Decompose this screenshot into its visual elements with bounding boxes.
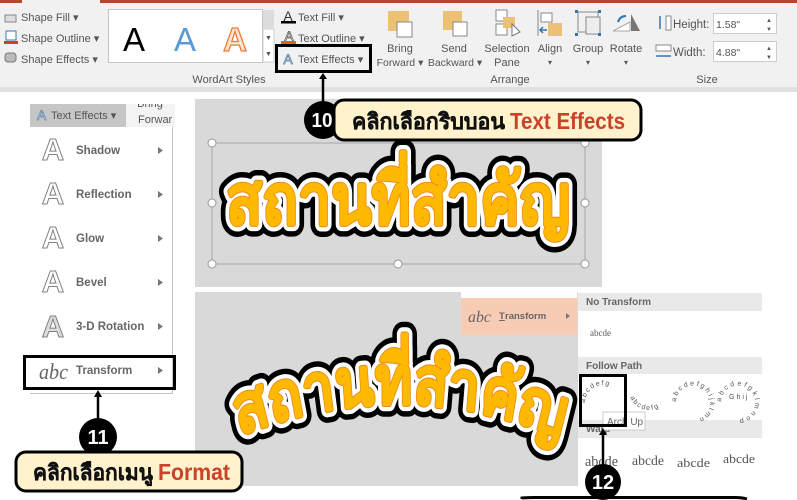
menu item: bevel: A: [42, 264, 64, 299]
size controls: ▼: [766, 27, 772, 33]
WordArt styles gallery: A: [123, 21, 145, 58]
arrange buttons: Pane: [494, 57, 520, 69]
menu item: 3-D rotation: A: [42, 309, 64, 344]
WordArt: arch up: สถานที่สำคัญ: [224, 322, 578, 461]
menu item: transform: abc: [39, 359, 68, 384]
menu item: reflection: A: [42, 176, 64, 211]
WordArt styles gallery: [108, 10, 274, 62]
menu item: 3-D rotation: [42, 309, 163, 344]
menu item: shadow: Shadow: [76, 145, 120, 157]
arrange buttons: Send: [441, 43, 467, 55]
size controls: 4.88": [716, 47, 740, 59]
tooltip: arch up: Arch Up: [607, 417, 644, 428]
size controls: ▼: [766, 55, 772, 61]
panel: transform gallery: Warp: [586, 424, 611, 435]
arrange buttons: ▾: [548, 58, 552, 67]
group labels: Arrange: [490, 74, 530, 86]
callout 10: Text Effects: [510, 108, 625, 134]
arrow to transform: [94, 390, 102, 425]
text fill, outline and effects commands: A: [283, 51, 293, 67]
size controls: Width:: [673, 47, 706, 59]
WordArt: straight: สถานที่สำคัญ: [226, 152, 570, 240]
arrange buttons: Rotate: [610, 43, 642, 55]
shape format buttons: Shape Outline ▾: [21, 33, 100, 45]
transform flyout item: T: [499, 311, 505, 322]
ribbon toolbar: [0, 0, 797, 92]
callout 10: คลิกเลือกริบบอน: [352, 109, 505, 134]
menu item: reflection: [42, 176, 163, 211]
text fill, outline and effects commands: Text Outline ▾: [298, 33, 365, 45]
size controls: ▲: [766, 18, 772, 24]
transform flyout item: ransform: [505, 311, 546, 322]
menu item: glow: A: [42, 220, 64, 255]
WordArt styles gallery: A: [223, 21, 247, 58]
warp samples: abcde: [677, 455, 710, 470]
menu item: glow: [42, 220, 163, 255]
text fill, outline and effects commands: [281, 8, 365, 67]
arrange buttons: Forward ▾: [377, 57, 424, 69]
WordArt: arch up: สถานที่สำคัญ: [232, 332, 570, 451]
menu item: bevel: [42, 264, 163, 299]
warp samples: [585, 451, 755, 470]
text fill, outline and effects commands: Text Effects ▾: [298, 54, 364, 66]
follow path samples: abcdefghijklmn: [672, 381, 716, 422]
shape format buttons: Shape Effects ▾: [21, 54, 98, 66]
text fill, outline and effects commands: A: [283, 8, 293, 24]
tooltip: arch up: [603, 412, 645, 430]
warp samples: abcde: [585, 454, 618, 470]
menu item: transform: Transform: [76, 365, 132, 377]
WordArt styles gallery: ▼: [265, 35, 272, 42]
menu item: shadow: [42, 132, 163, 167]
callout 11: 11: [88, 427, 108, 449]
highlight box: arch up: [580, 376, 626, 426]
WordArt: straight: สถานที่สำคัญ: [226, 152, 570, 240]
WordArt: straight: สถานที่สำคัญ: [226, 152, 570, 240]
follow path samples: Ghij: [729, 394, 749, 401]
callout 11: [16, 418, 242, 491]
panel: text effects menu: [30, 98, 175, 394]
shape format buttons: [4, 12, 100, 66]
panel: text effects menu: A: [37, 107, 47, 123]
callout 11: Format: [158, 459, 230, 485]
group labels: [192, 74, 718, 86]
menu item: bevel: Bevel: [76, 277, 107, 289]
arrange buttons: Group: [573, 43, 603, 55]
text fill, outline and effects commands: A: [284, 28, 294, 44]
WordArt: arch up: สถานที่สำคัญ: [229, 327, 573, 456]
arrange buttons: Bring: [387, 43, 413, 55]
callout 12: [522, 464, 747, 500]
arrange buttons: Selection: [484, 43, 530, 55]
follow path samples: [582, 380, 760, 423]
menu item: transform: [39, 359, 163, 384]
shape format buttons: Shape Fill ▾: [21, 12, 79, 24]
menu item: 3-D rotation: 3-D Rotation: [76, 321, 144, 333]
arrow to arch up: [599, 428, 607, 468]
follow path samples: abcdefg: [582, 380, 610, 403]
arrange buttons: ▾: [586, 58, 590, 67]
text fill, outline and effects commands: Text Fill ▾: [298, 12, 344, 24]
callout 12: 12: [592, 472, 614, 494]
panel: transform gallery: abcde: [590, 328, 611, 338]
callout 10: [304, 100, 641, 140]
group labels: WordArt Styles: [192, 74, 266, 86]
callout 10: 10: [312, 110, 332, 132]
callout 11: คลิกเลือกเมนู: [33, 460, 153, 487]
warp samples: abcde: [632, 454, 664, 469]
arrow to text effects: [319, 73, 327, 108]
panel: transform gallery: [578, 293, 762, 470]
arrange buttons: ▾: [624, 58, 628, 67]
panel: text effects menu: Bring: [137, 98, 163, 110]
highlight box: transform: [24, 356, 174, 388]
warp samples: abcde: [723, 451, 755, 466]
WordArt styles gallery: ▼: [265, 51, 272, 58]
panel: slide with arched WordArt: [195, 292, 578, 486]
panel: text effects menu: Forwar: [138, 114, 173, 126]
highlight box: text effects: [276, 46, 370, 72]
follow path samples: abcdefgklmnop: [718, 381, 760, 423]
transform flyout item: abc: [468, 309, 491, 326]
selection frame: [208, 139, 589, 268]
menu item: glow: Glow: [76, 233, 104, 245]
arrange buttons: Backward ▾: [428, 57, 483, 69]
panel: transform gallery: Follow Path: [586, 361, 642, 372]
menu item: shadow: A: [42, 132, 64, 167]
size controls: 1.58": [716, 19, 740, 31]
size controls: ▲: [766, 46, 772, 52]
panel: transform gallery: No Transform: [586, 297, 651, 308]
WordArt: straight: สถานที่สำคัญ: [226, 152, 570, 240]
WordArt styles gallery: A: [174, 21, 196, 58]
size controls: Height:: [673, 19, 709, 31]
transform flyout item: [461, 292, 577, 335]
group labels: Size: [696, 74, 718, 86]
panel: slide with straight WordArt: [195, 99, 602, 287]
size controls: [656, 14, 776, 62]
menu item: reflection: Reflection: [76, 189, 132, 201]
follow path samples: abcdefg: [630, 396, 658, 410]
panel: text effects menu: Text Effects ▾: [51, 110, 117, 122]
WordArt: arch up: สถานที่สำคัญ: [233, 332, 568, 450]
arrange buttons: [377, 10, 642, 69]
arrange buttons: Align: [538, 43, 562, 55]
